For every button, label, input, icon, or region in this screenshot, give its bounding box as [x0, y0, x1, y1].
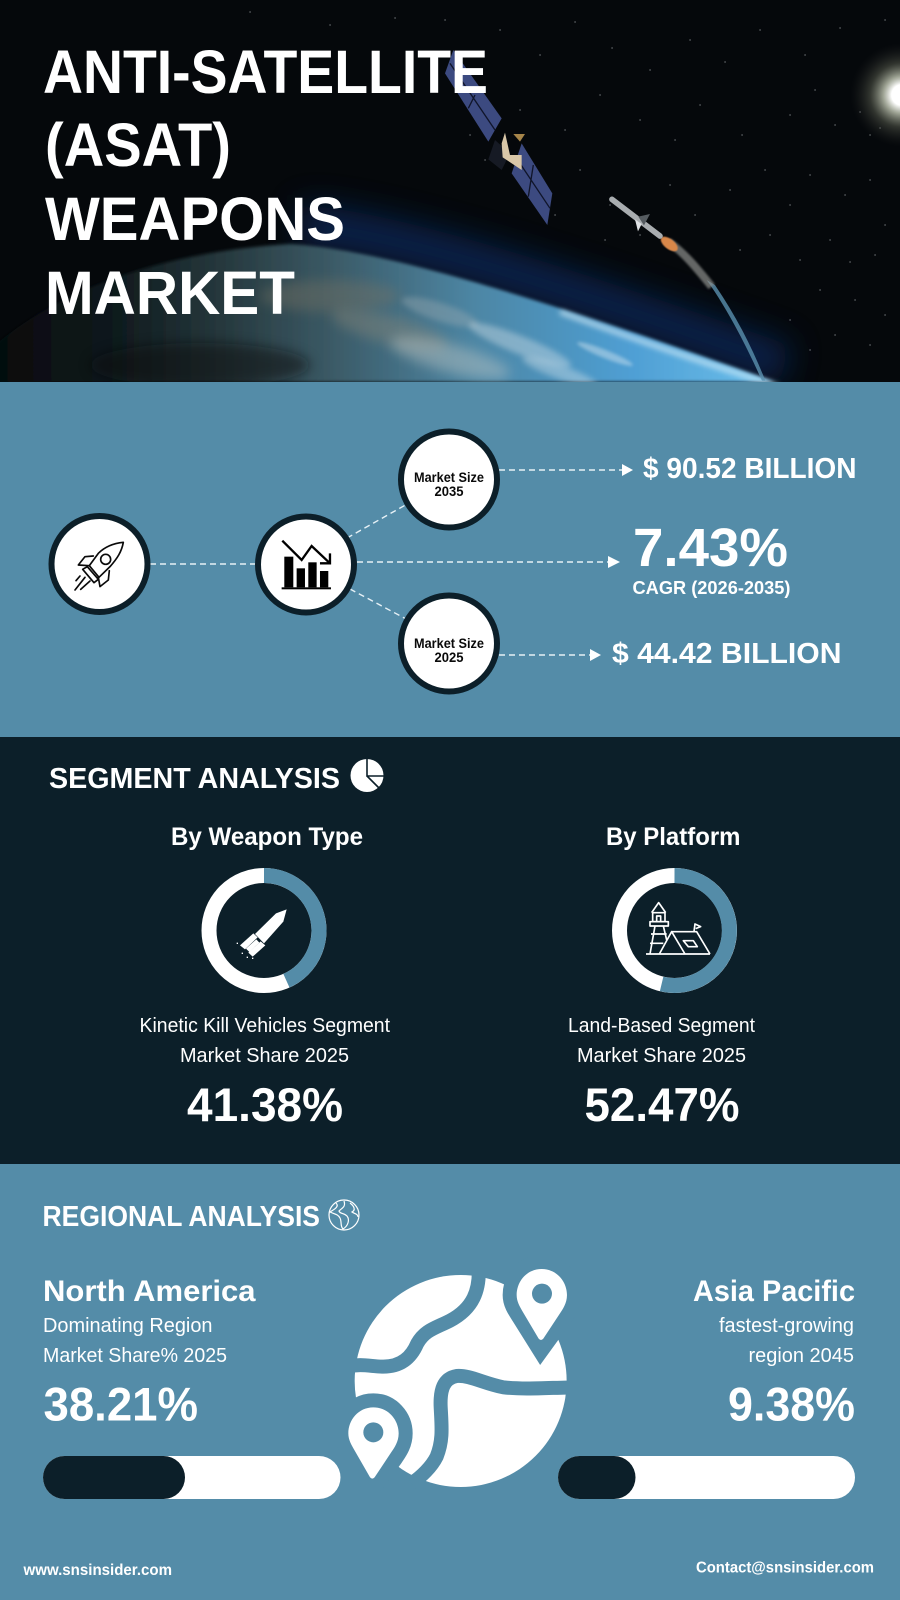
badge: market size 2025	[401, 596, 497, 692]
text: kinetic kill label: Kinetic Kill Vehicles Segment	[140, 1014, 390, 1037]
label: CAGR period: CAGR (2026-2035)	[632, 577, 790, 598]
arrow: to 2035 value	[622, 464, 633, 476]
missile	[612, 199, 765, 381]
footer: website: www.snsinsider.com	[23, 1562, 172, 1579]
sun glare	[856, 50, 900, 140]
arrow: to 2025 value	[590, 649, 601, 661]
icon: globe with map pins	[347, 1267, 580, 1487]
footer: contact: Contact@snsinsider.com	[696, 1560, 874, 1576]
text: north america	[43, 1275, 256, 1367]
title: MARKET	[45, 259, 295, 327]
connector lines	[150, 470, 622, 655]
text: north america: Market Share% 2025	[43, 1344, 227, 1367]
text: north america: Dominating Region	[43, 1314, 212, 1337]
text: north america: North America	[43, 1275, 256, 1308]
donut chart: platform	[620, 876, 730, 986]
progress bar: north america	[43, 1456, 340, 1499]
icon: top-right pin	[517, 1269, 567, 1340]
title: WEAPONS	[45, 185, 345, 253]
text: asia pacific: region 2045	[748, 1344, 854, 1367]
text: land-based label	[568, 1014, 755, 1067]
value: land-based share: 52.47%	[584, 1078, 740, 1131]
icon: chart circle	[258, 516, 354, 612]
badge: market size 2025: 2025	[434, 650, 464, 665]
satellite	[445, 50, 552, 225]
text: kinetic kill label	[140, 1014, 390, 1067]
donut chart: weapon type	[209, 876, 319, 986]
badge: market size 2035: 2035	[434, 484, 464, 499]
heading: regional analysis: REGIONAL ANALYSIS	[42, 1201, 320, 1233]
badge: market size 2025: Market Size	[414, 636, 484, 651]
badge: market size 2035	[401, 432, 497, 528]
panel: hero banner	[0, 0, 900, 392]
value: CAGR: 7.43%	[633, 518, 788, 578]
icon: missile	[237, 909, 287, 959]
panel: market overview	[0, 382, 900, 737]
value: 2035 market size: $ 90.52 BILLION	[643, 453, 856, 485]
earth atmosphere glow	[300, 226, 785, 366]
value: asia pacific share: 9.38%	[728, 1378, 855, 1430]
value: kinetic kill share: 41.38%	[187, 1078, 343, 1131]
badge: market size 2035: Market Size	[414, 470, 484, 485]
subheading: by platform: By Platform	[606, 823, 740, 851]
progress bar: asia pacific	[558, 1456, 855, 1499]
title	[43, 38, 488, 327]
icon: lighthouse and tent	[646, 903, 710, 954]
icon: globe outline	[329, 1200, 359, 1230]
panel: regional analysis	[0, 1164, 900, 1600]
subheading: by weapon type: By Weapon Type	[171, 823, 363, 851]
text: asia pacific: Asia Pacific	[693, 1275, 855, 1308]
title: ANTI-SATELLITE	[43, 38, 488, 106]
icon: pie chart	[350, 759, 384, 792]
text: asia pacific: fastest-growing	[719, 1314, 854, 1337]
heading: segment analysis: SEGMENT ANALYSIS	[49, 763, 340, 795]
text: kinetic kill label: Market Share 2025	[180, 1044, 349, 1067]
icon: bottom-left pin	[348, 1407, 399, 1479]
text: land-based label: Market Share 2025	[577, 1044, 746, 1067]
arrow: to CAGR value	[608, 556, 620, 568]
earth	[0, 244, 778, 392]
panel: segment analysis	[0, 737, 900, 1164]
value: north america share: 38.21%	[44, 1378, 198, 1430]
star field	[250, 12, 885, 350]
title: (ASAT)	[45, 111, 231, 179]
value: 2025 market size: $ 44.42 BILLION	[612, 638, 842, 670]
text: land-based label: Land-Based Segment	[568, 1014, 755, 1037]
text: asia pacific	[693, 1275, 855, 1367]
icon: rocket circle	[52, 516, 148, 612]
